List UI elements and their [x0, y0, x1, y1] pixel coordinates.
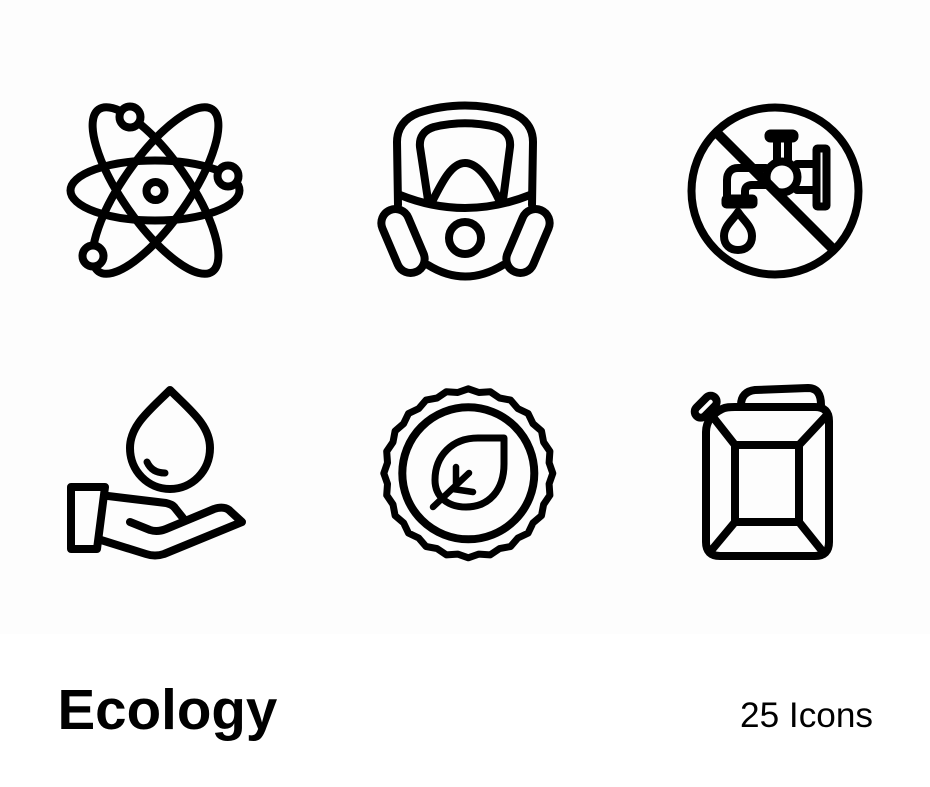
- title: Ecology: [58, 678, 278, 741]
- icon: atom: [70, 90, 240, 291]
- icon: jerrycan: [692, 388, 829, 556]
- icon: gas mask: [377, 106, 554, 277]
- icon: hand holding water drop: [71, 390, 242, 556]
- icon count label: 25 Icons: [740, 696, 873, 735]
- icon: leaf badge: [384, 389, 553, 558]
- icon: no water tap: [692, 108, 858, 274]
